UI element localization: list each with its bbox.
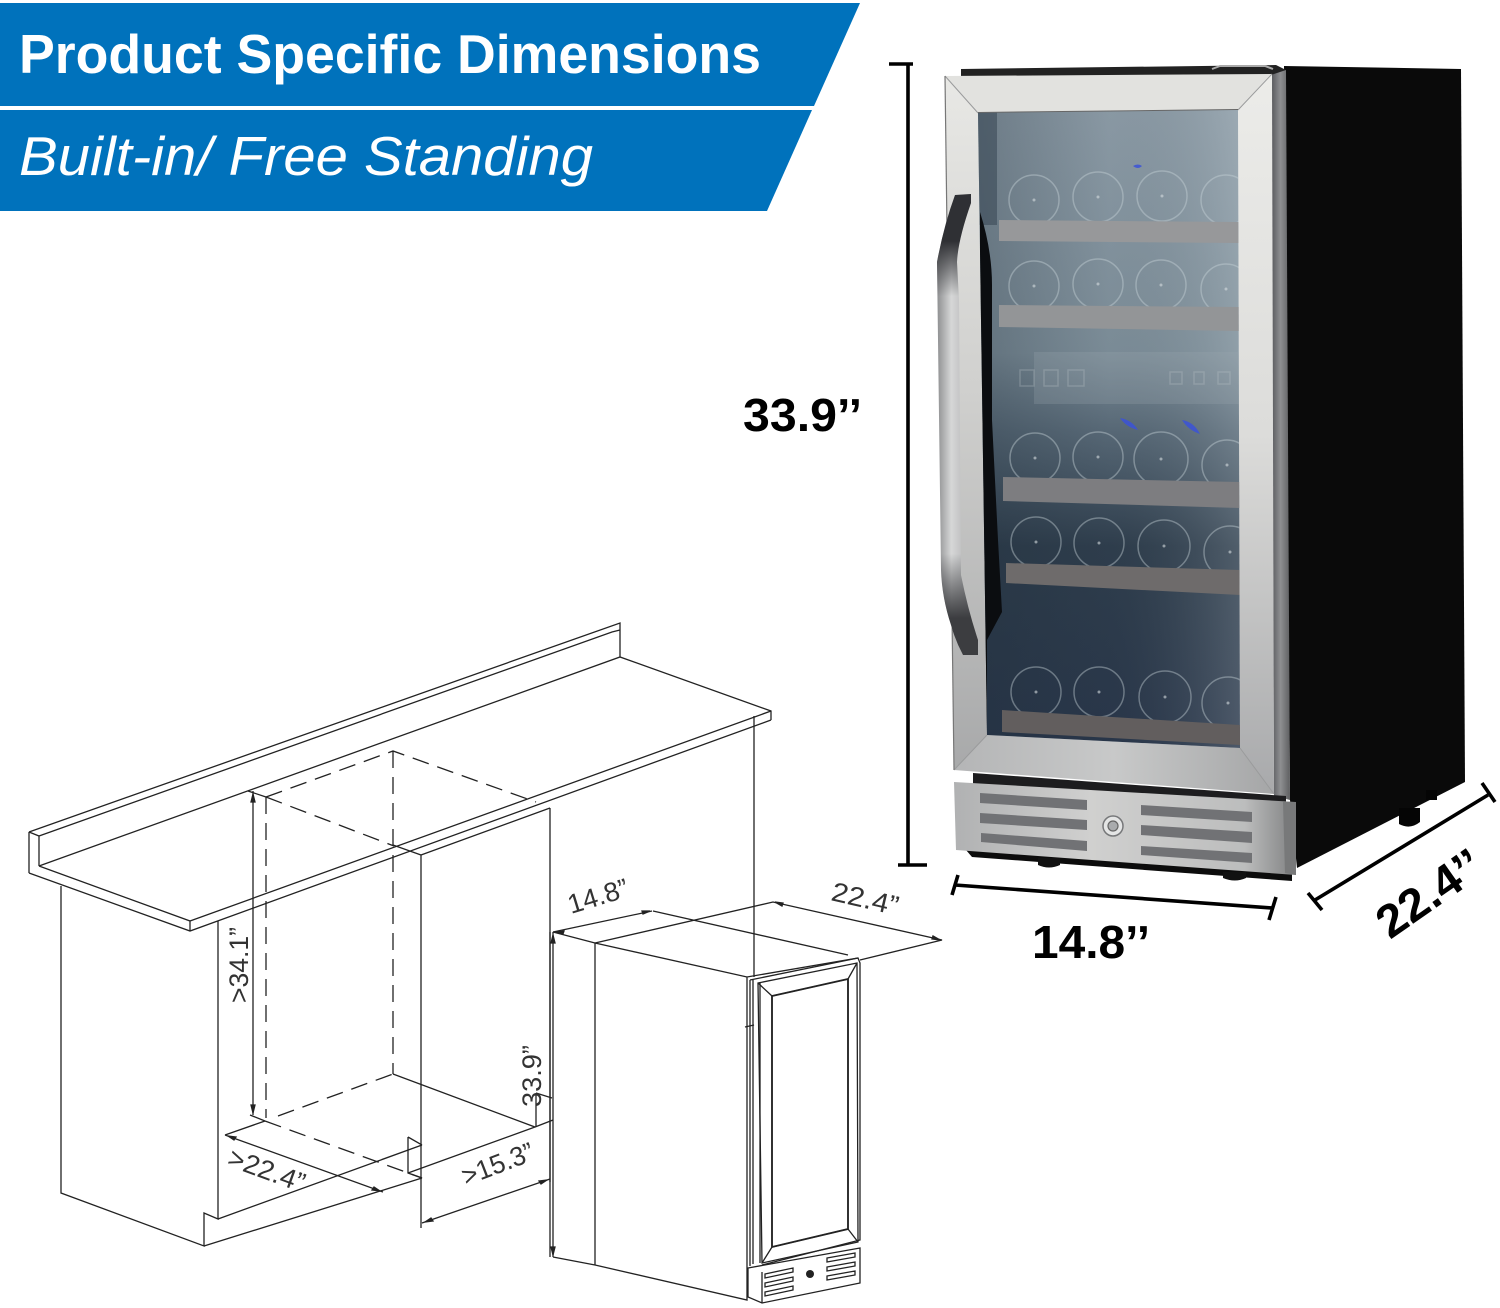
left vents [980, 793, 1087, 851]
cutout labels: >34.1” [224, 927, 254, 1003]
top edge and hinge [961, 65, 1286, 78]
large dimension width [952, 875, 1276, 968]
display panel [1020, 352, 1240, 404]
cutout labels [224, 927, 547, 1198]
glass door with bottles and shelves [975, 108, 1256, 753]
bottle rows [1009, 171, 1256, 729]
cutout labels: >22.4” [224, 1142, 309, 1198]
wine cooler product photo [937, 65, 1465, 881]
banner: product title [0, 3, 860, 106]
large dimension depth [1308, 783, 1495, 948]
cabinet side [1284, 66, 1465, 868]
base vents [765, 1253, 855, 1296]
dark door seal [978, 212, 1002, 735]
dashed opening [265, 751, 536, 1178]
cooler labels [564, 873, 902, 921]
large dimension height [743, 64, 927, 865]
base black strip [966, 850, 1292, 881]
blue led glints [1120, 164, 1200, 434]
front feet [1038, 858, 1246, 880]
banner: installation type: Built-in/ Free Standing [19, 125, 593, 187]
side foot [1399, 790, 1437, 827]
door handle [937, 194, 978, 655]
right vents [1141, 805, 1252, 863]
door frame [945, 74, 1274, 794]
cabinet outlines [61, 716, 754, 1246]
large dimension height: 33.9’’ [743, 389, 862, 441]
dark gap above base [973, 773, 1286, 806]
large dimension depth: 22.4’’ [1366, 838, 1492, 948]
bottle caps [1032, 194, 1232, 704]
wooden shelves [999, 220, 1240, 745]
cutout dimension lines [225, 791, 552, 1223]
banner: product title: Product Specific Dimensions [19, 23, 761, 85]
base grille [954, 782, 1296, 875]
countertop [29, 623, 771, 931]
knob [806, 1270, 814, 1278]
key lock [1103, 816, 1123, 836]
cutout labels: >15.3” [457, 1137, 538, 1192]
header banner [0, 3, 860, 211]
line drawing: counter cutout [29, 623, 771, 1246]
large dimension width: 14.8’’ [1032, 916, 1150, 968]
cooler labels: 22.4” [829, 877, 902, 921]
cabinet lines [550, 902, 942, 1300]
cutout labels: 33.9” [517, 1045, 547, 1107]
base grille lines [748, 1248, 860, 1303]
cooler labels: 14.8” [564, 873, 632, 920]
banner: installation type [0, 110, 812, 211]
line drawing: wine cooler [550, 873, 942, 1303]
door side strip [1271, 70, 1290, 800]
door lines [745, 958, 860, 1266]
